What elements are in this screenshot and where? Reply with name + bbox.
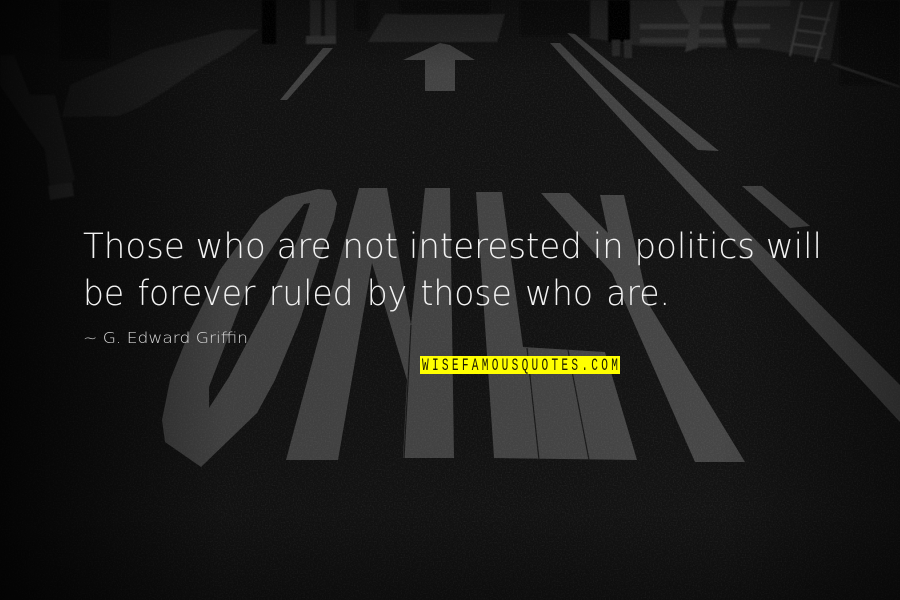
quote text [83, 227, 822, 314]
letter Y [541, 193, 745, 462]
letter O [162, 189, 337, 467]
pedestrians at the top [262, 0, 738, 58]
author attribution: ~ G. Edward Griffin [83, 329, 248, 347]
quote line 1: Those who are not interested in politics will [83, 227, 822, 267]
road paint: lane dash [280, 48, 333, 100]
road paint: word ONLY [162, 188, 745, 467]
watermark badge: WISEFAMOUSQUOTES.COM [422, 357, 618, 376]
road paint: lane stripes [550, 33, 900, 422]
sidewalk patch at upper left [62, 29, 260, 117]
pedestrian legs on the left [0, 0, 110, 200]
letter L [476, 192, 637, 460]
crosswalk area at top centre [368, 14, 505, 42]
road paint: straight-ahead arrow [403, 43, 475, 91]
pavement and buildings at top right [585, 0, 900, 88]
cracks in the painted letters [404, 325, 589, 460]
quote line 2: be forever ruled by those who are. [83, 274, 670, 314]
letter N [286, 188, 454, 460]
